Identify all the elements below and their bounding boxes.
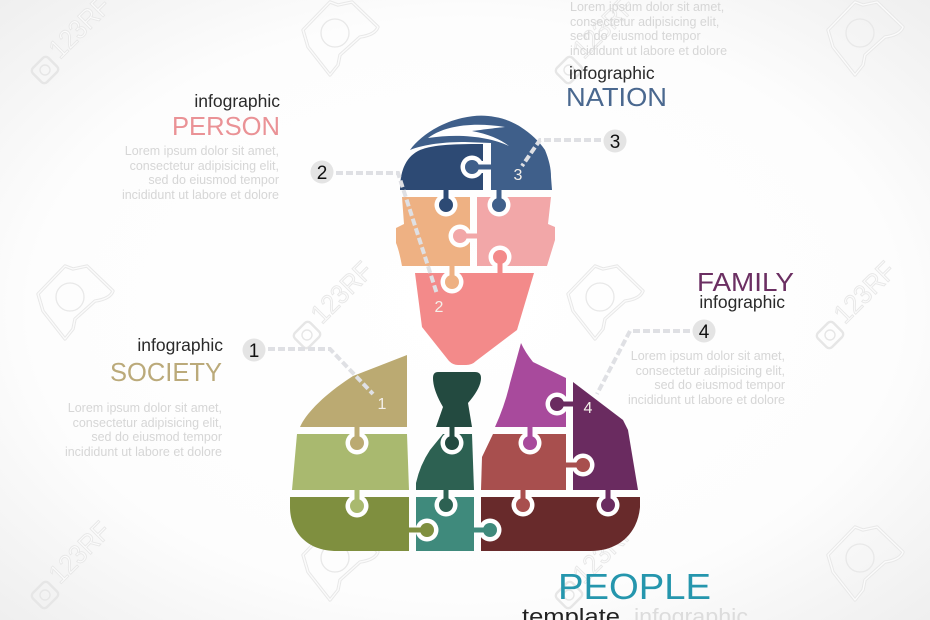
text block: family xyxy=(628,267,794,407)
text block: person xyxy=(122,91,280,202)
figure numbers: 2 xyxy=(435,299,444,316)
leader line 3 xyxy=(522,140,601,166)
figure numbers: 1 xyxy=(378,396,387,413)
text block: society: consectetur adipisicing elit, xyxy=(73,416,222,430)
leader line 4 xyxy=(597,331,690,394)
person figure: suit xyxy=(290,343,640,551)
main title: PEOPLE xyxy=(558,566,711,607)
leader line 1 xyxy=(268,349,373,394)
text block: family: Lorem ipsum dolor sit amet, xyxy=(631,349,785,363)
text block: society: Lorem ipsum dolor sit amet, xyxy=(68,401,222,415)
text block: person: Lorem ipsum dolor sit amet, xyxy=(125,144,279,158)
head piece: coral chin and neck xyxy=(415,246,534,365)
watermark: logo text: 123RF xyxy=(567,516,641,589)
text block: society: infographic xyxy=(137,335,223,355)
marker 4: 4 xyxy=(699,322,710,343)
text block: family: consectetur adipisicing elit, xyxy=(636,364,785,378)
suit piece: teal xyxy=(416,497,502,551)
text block: nation: incididunt ut labore et dolore xyxy=(570,44,727,58)
head piece: peach xyxy=(396,197,477,294)
text block: society: SOCIETY xyxy=(110,357,222,387)
suit piece: red xyxy=(481,434,566,490)
tie piece: mid green xyxy=(416,434,474,516)
watermark: logo text: 123RF xyxy=(305,256,379,329)
person figure: head xyxy=(396,116,555,365)
watermark: logo text: 123RF xyxy=(828,256,902,329)
text block: nation xyxy=(566,0,727,112)
text block: person: incididunt ut labore et dolore xyxy=(122,188,279,202)
marker 1: 1 xyxy=(249,341,259,362)
text block: person: PERSON xyxy=(172,111,280,141)
marker 2 xyxy=(310,160,334,184)
text block: person: sed do eiusmod tempor xyxy=(148,173,279,187)
red piece connectors xyxy=(512,454,594,516)
marker 3 xyxy=(604,130,626,153)
head piece: pink xyxy=(477,197,555,266)
marker 3: 3 xyxy=(610,132,620,153)
text block: nation: NATION xyxy=(566,82,667,112)
text block: family: incididunt ut labore et dolore xyxy=(628,393,785,407)
figure numbers: 4 xyxy=(584,400,593,417)
marker 4 xyxy=(692,320,716,343)
hair piece: blue xyxy=(410,116,552,216)
suit piece: tan xyxy=(300,355,407,454)
text block: nation: consectetur adipisicing elit, xyxy=(570,15,719,29)
watermark: logo text: 123RF xyxy=(43,516,117,589)
text block: society: sed do eiusmod tempor xyxy=(91,430,222,444)
marker 1 xyxy=(242,338,266,362)
text block: family: infographic xyxy=(699,292,785,312)
figure numbers: 3 xyxy=(514,167,523,184)
marker 2: 2 xyxy=(317,163,327,184)
suit piece: purple xyxy=(546,382,638,516)
text block: nation: Lorem ipsum dolor sit amet, xyxy=(570,0,724,14)
text block: person: infographic xyxy=(194,91,280,111)
main title xyxy=(522,566,748,620)
suit piece: light olive xyxy=(292,434,409,518)
text block: family: FAMILY xyxy=(697,267,794,297)
text block: family: sed do eiusmod tempor xyxy=(654,378,785,392)
text block: nation: sed do eiusmod tempor xyxy=(570,29,701,43)
text block: society xyxy=(65,335,223,459)
tie piece: knot xyxy=(433,372,481,454)
leader line 2 xyxy=(336,173,437,294)
text block: society: incididunt ut labore et dolore xyxy=(65,445,222,459)
figure numbers xyxy=(378,167,593,417)
hair piece: dark navy xyxy=(400,144,483,216)
suit piece: maroon xyxy=(481,497,640,551)
suit piece: olive xyxy=(290,497,438,551)
text block: person: consectetur adipisicing elit, xyxy=(130,159,279,173)
text block: nation: infographic xyxy=(569,63,655,83)
suit piece: magenta xyxy=(495,343,566,454)
